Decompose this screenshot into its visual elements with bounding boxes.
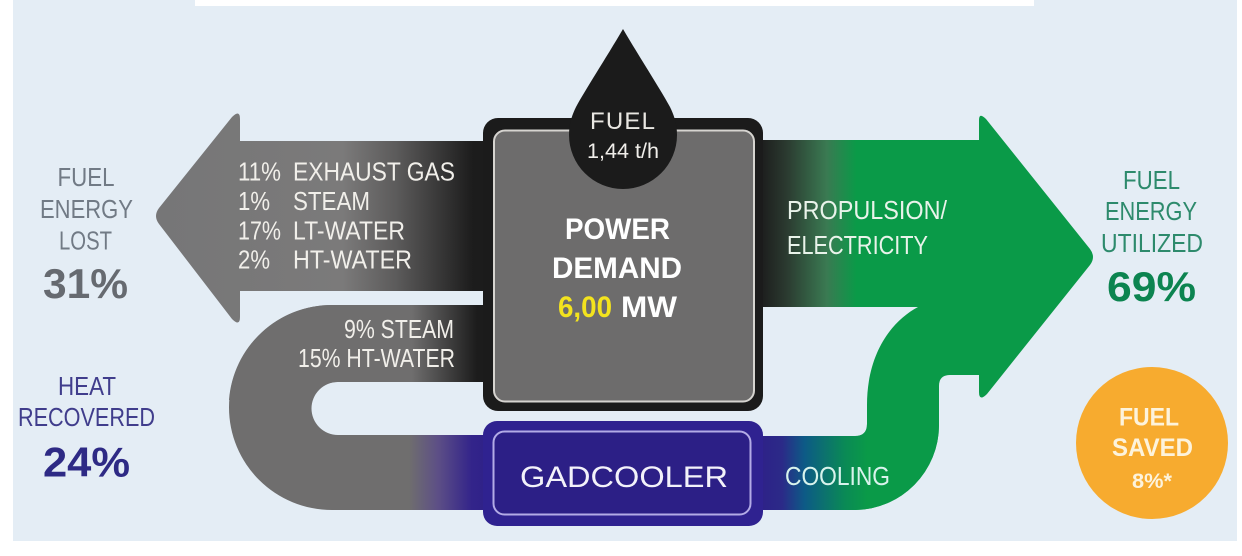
gadcooler box: GADCOOLER [520, 461, 728, 494]
label: heat recovered: RECOVERED [18, 402, 155, 432]
arrow: fuel energy lost [156, 113, 488, 323]
loss breakdown list: LT-WATER [293, 216, 405, 246]
label: heat recovered [18, 371, 155, 486]
propulsion label: PROPULSION/ [787, 195, 948, 225]
top white bar [195, 0, 1034, 6]
loss breakdown list: 11% [238, 156, 281, 186]
label: fuel energy utilized: ENERGY [1105, 196, 1197, 226]
loss breakdown list [238, 156, 455, 274]
icon: fuel drop [569, 29, 677, 189]
power demand text: MW [621, 291, 678, 324]
loss breakdown list: 17% [238, 216, 281, 246]
arrow: fuel energy utilized [760, 116, 1093, 510]
power demand text: 6,00 [558, 291, 612, 324]
recovery breakdown text [298, 314, 455, 373]
label: fuel energy utilized: UTILIZED [1101, 228, 1203, 258]
loss breakdown list: EXHAUST GAS [293, 156, 455, 186]
recovery breakdown text: 9% STEAM [344, 314, 454, 344]
label: fuel energy utilized [1101, 165, 1203, 310]
label: heat recovered: HEAT [58, 371, 116, 401]
power demand text: POWER [565, 213, 670, 246]
loss breakdown list: 1% [238, 186, 270, 216]
badge: fuel saved: 8%* [1132, 470, 1173, 493]
badge: fuel saved: FUEL [1119, 404, 1179, 432]
propulsion label [787, 195, 948, 260]
badge: fuel saved: SAVED [1112, 434, 1193, 462]
loss breakdown list: HT-WATER [293, 244, 412, 274]
label: fuel energy utilized: FUEL [1123, 165, 1180, 195]
power demand text [552, 213, 682, 324]
icon: fuel drop: FUEL [590, 108, 655, 135]
label: fuel energy lost: LOST [59, 226, 112, 256]
cooling label: COOLING [785, 461, 890, 491]
loss breakdown list: STEAM [293, 186, 370, 216]
badge: fuel saved [1076, 367, 1228, 519]
recovery breakdown text: 15% HT-WATER [298, 343, 455, 373]
label: heat recovered: 24% [43, 438, 130, 486]
gadcooler box [483, 421, 763, 526]
label: fuel energy lost [40, 162, 133, 307]
propulsion label: ELECTRICITY [787, 230, 928, 260]
label: fuel energy utilized: 69% [1107, 263, 1196, 310]
label: fuel energy lost: FUEL [58, 162, 114, 192]
label: fuel energy lost: 31% [43, 260, 128, 307]
label: fuel energy lost: ENERGY [40, 194, 133, 224]
heat recovery loop [229, 305, 488, 510]
power demand box [483, 118, 763, 411]
icon: fuel drop: 1,44 t/h [587, 140, 659, 163]
loss breakdown list: 2% [238, 244, 270, 274]
power demand text: DEMAND [552, 252, 682, 285]
